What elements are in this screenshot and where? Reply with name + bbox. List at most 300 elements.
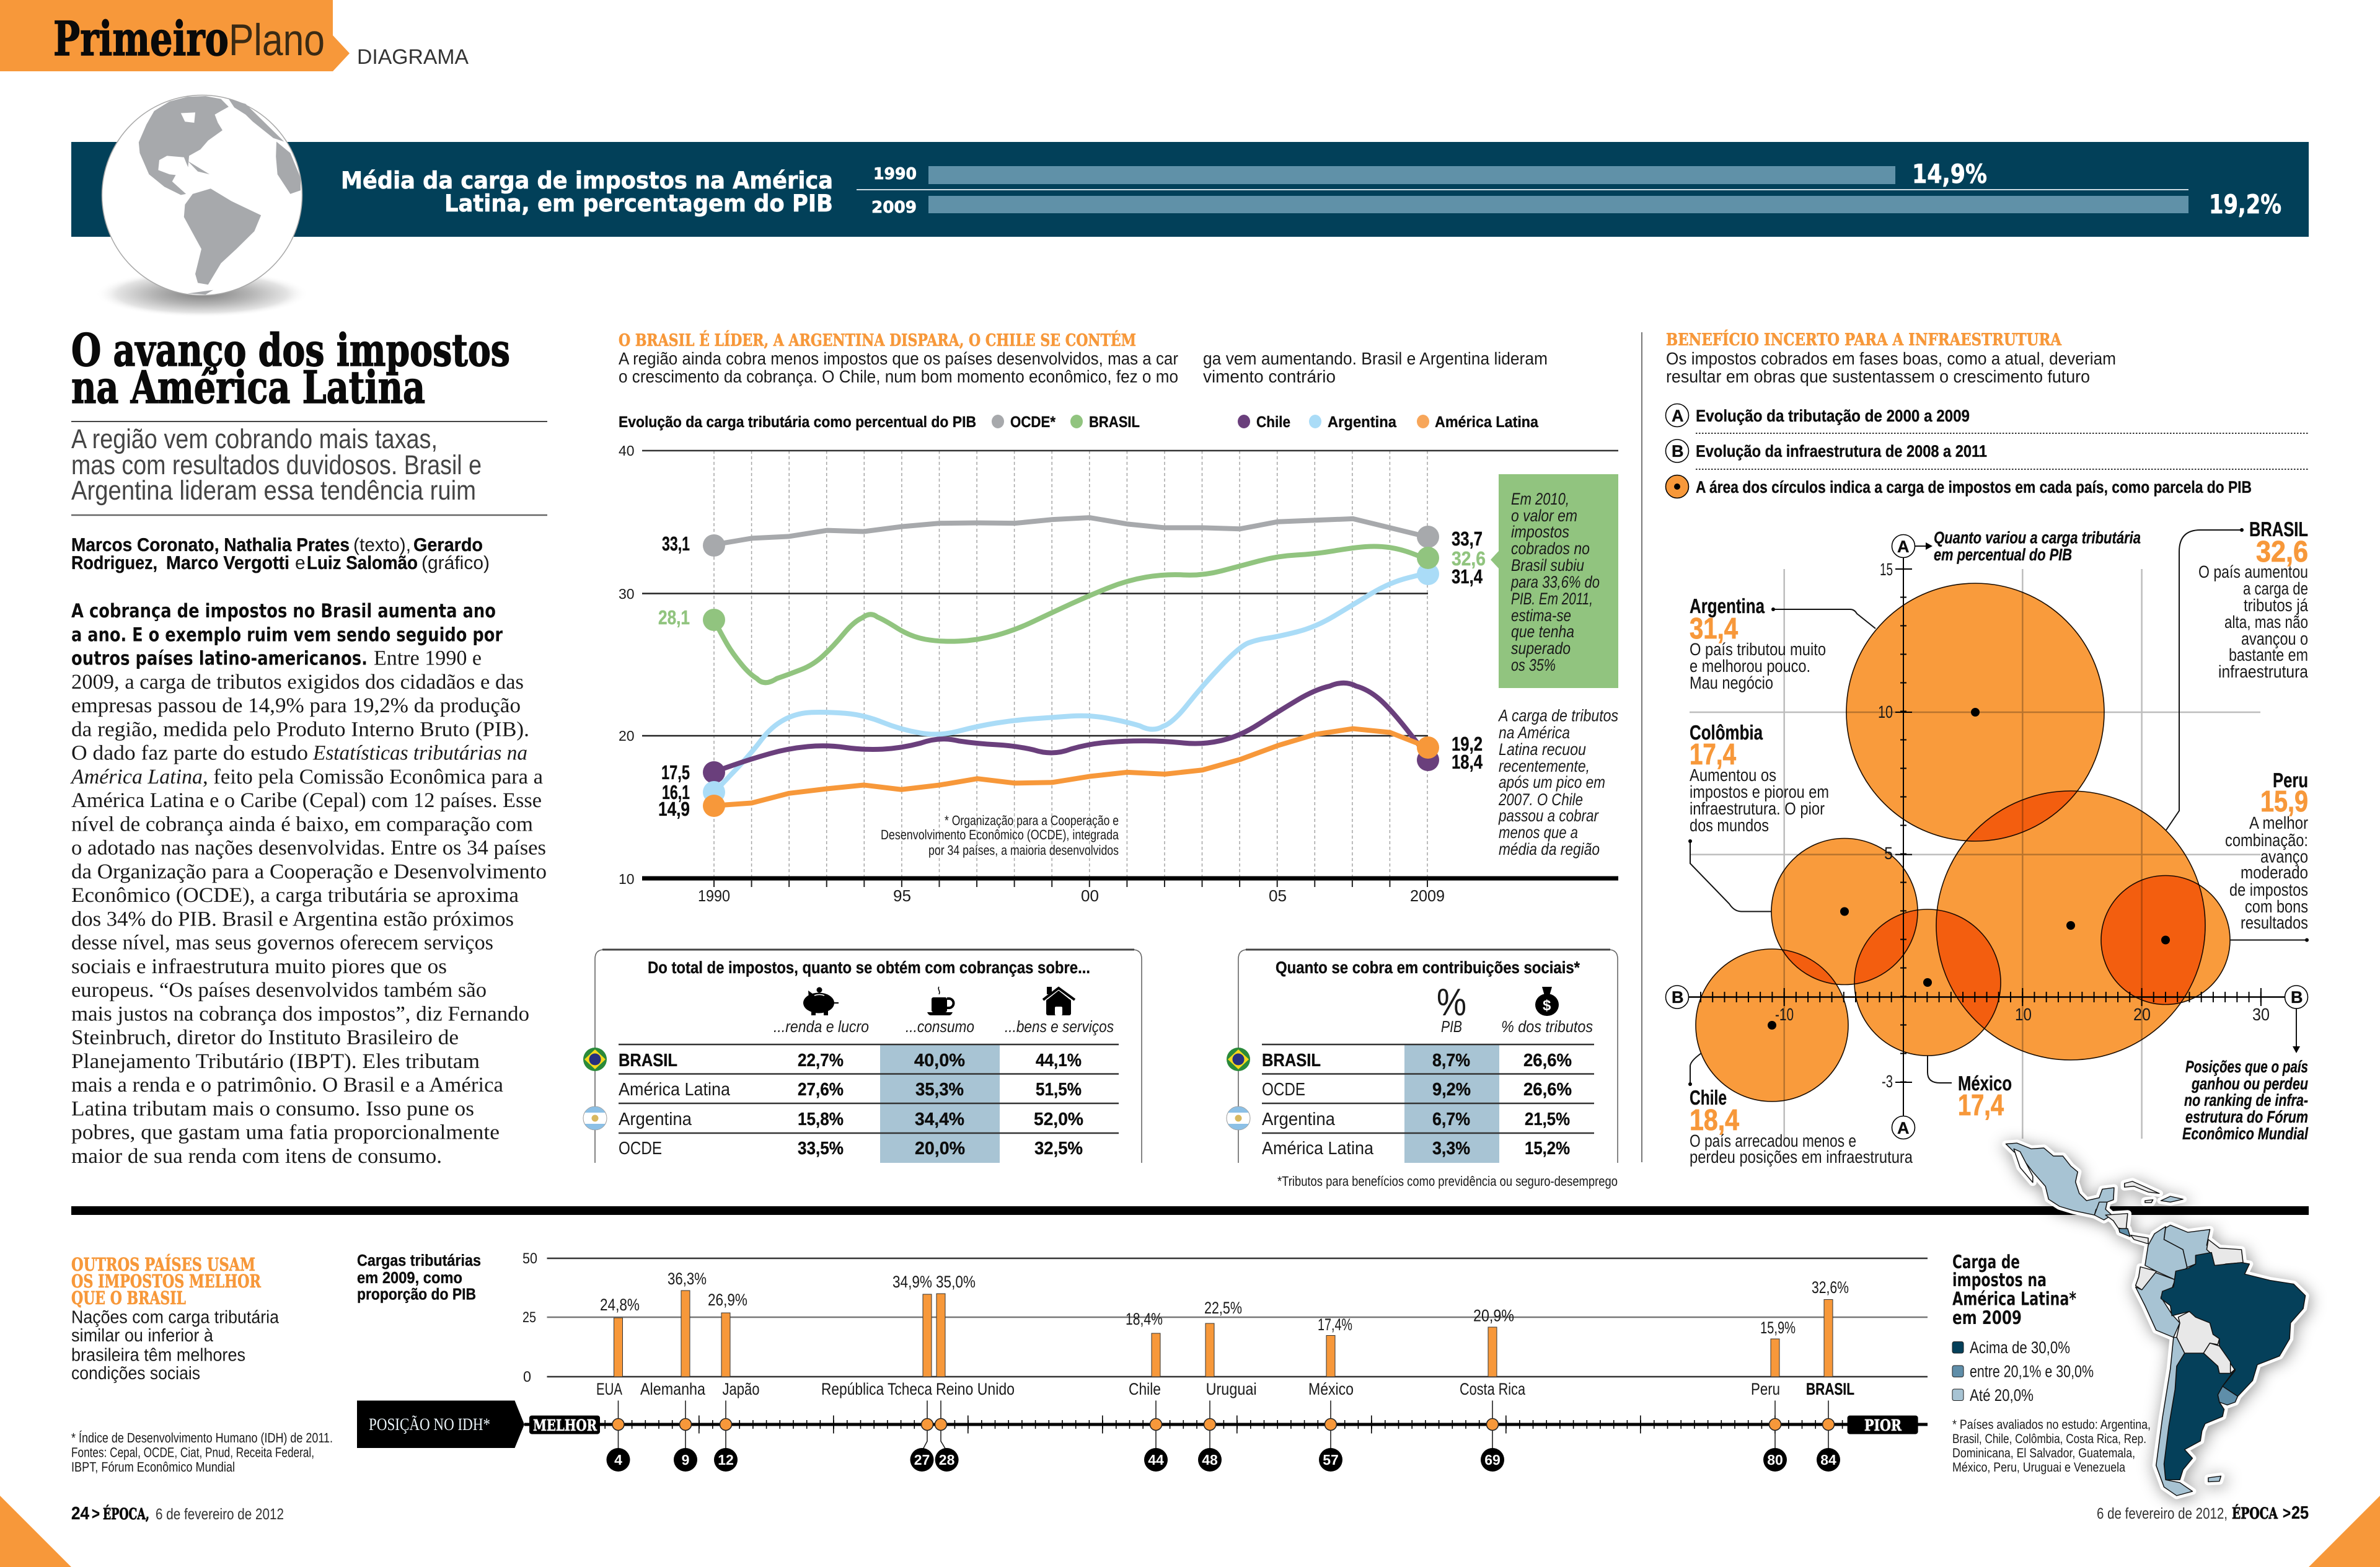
footer left: > bbox=[92, 1504, 100, 1523]
label: Brasil: avançou o bbox=[2241, 629, 2308, 648]
timeline: posição no IDH: 57 bbox=[1323, 1452, 1339, 1468]
callout: green box Brasil: para 33,6% do bbox=[1510, 573, 1600, 591]
line chart: carga tributária: 33,7 bbox=[1452, 527, 1483, 550]
line: Chile bbox=[714, 683, 1428, 772]
axis badge B left bbox=[1666, 986, 1688, 1009]
callout: green box Brasil: Em 2010, bbox=[1511, 490, 1569, 508]
label: Brasil: 32,6 bbox=[2256, 536, 2308, 568]
panel: contribuições sociais: 9,2% bbox=[1432, 1080, 1471, 1100]
article body text: Steinbruch, diretor do Instituto Brasileiro de bbox=[71, 1026, 459, 1049]
article body text: O dado faz parte do estudo bbox=[71, 742, 308, 765]
article body text: 2009, a carga de tributos exigidos dos cidadãos e das bbox=[71, 671, 524, 694]
panel: cobranças sobre: 35,3% bbox=[915, 1080, 964, 1100]
panel: contribuições sociais: 3,3% bbox=[1432, 1139, 1470, 1159]
authors: Rodriguez, bbox=[71, 553, 157, 573]
line chart legend bbox=[619, 413, 1539, 431]
label: Posição no IDH bbox=[357, 1401, 524, 1448]
line chart: carga tributária: 17,5 bbox=[661, 761, 690, 784]
bar chart: cargas tributárias: 35,0% bbox=[936, 1273, 976, 1291]
footer left bbox=[71, 1504, 284, 1524]
panel: cobranças sobre: OCDE bbox=[619, 1139, 662, 1159]
bubble chart key: A área dos círculos indica a carga de impostos em cada país, como parcela do PIB bbox=[1696, 478, 2252, 497]
axis badge A bottom: A bbox=[1897, 1119, 1909, 1137]
axis note B bbox=[2182, 1057, 2308, 1143]
icon: house bbox=[1043, 987, 1075, 1015]
label: Brasil: alta, mas não bbox=[2224, 612, 2308, 632]
flag: Brasil bbox=[1227, 1048, 1250, 1071]
panel: contribuições sociais: BRASIL bbox=[1262, 1051, 1321, 1070]
banner: média da carga de impostos: 19,2% bbox=[2209, 189, 2281, 219]
label: Peru: de impostos bbox=[2229, 880, 2308, 899]
timeline: posição no IDH: 44 bbox=[1148, 1452, 1164, 1468]
panel: contribuições sociais: % dos tributos bbox=[1501, 1017, 1593, 1036]
line chart legend: América Latina bbox=[1435, 413, 1539, 431]
authors: Gerardo bbox=[413, 535, 483, 555]
label: Peru: A melhor bbox=[2249, 813, 2308, 832]
bubble chart key: Evolução da infraestrutura de 2008 a 2011 bbox=[1696, 442, 1987, 461]
leader lines bbox=[1690, 530, 2307, 1084]
label: Colômbia: dos mundos bbox=[1690, 816, 1769, 835]
bar chart: cargas tributárias: 20,9% bbox=[1473, 1307, 1514, 1325]
headline: O avanço dos impostos bbox=[71, 324, 510, 376]
bar chart: cargas tributárias: 50 bbox=[522, 1250, 537, 1267]
bubble chart key: A bbox=[1672, 407, 1683, 425]
section text: outros países: OUTROS PAÍSES USAM bbox=[71, 1254, 255, 1275]
panel: contribuições sociais: Argentina bbox=[1262, 1110, 1336, 1129]
label: Posição no IDH: POSIÇÃO NO IDH* bbox=[369, 1415, 490, 1434]
panel: contribuições sociais: 6,7% bbox=[1432, 1110, 1470, 1129]
bubbles bbox=[1696, 583, 2230, 1101]
panel: cobranças sobre: 44,1% bbox=[1036, 1051, 1082, 1070]
line chart: carga tributária: 95 bbox=[893, 886, 911, 905]
article body text: o adotado nas nações desenvolvidas. Entre os 34 países bbox=[71, 837, 546, 860]
icon: money bag bbox=[1535, 987, 1559, 1016]
article body text: maior de sua renda com itens de consumo. bbox=[71, 1145, 442, 1168]
footnote: OCDE: Desenvolvimento Econômico (OCDE), integrada bbox=[881, 827, 1119, 842]
panel: cobranças sobre: BRASIL bbox=[619, 1051, 677, 1070]
map legend: Acima de 30,0% bbox=[1970, 1338, 2070, 1357]
article body text: mais justos na cobrança dos impostos”, diz Fernando bbox=[71, 1002, 529, 1025]
footnote: sources: * Índice de Desenvolvimento Humano (IDH) de 2011. bbox=[71, 1430, 333, 1446]
line chart legend: Chile bbox=[1256, 413, 1290, 431]
bubble chart: tributação x infraestrutura bbox=[1666, 518, 2309, 1167]
label: Chile: O país arrecadou menos e bbox=[1690, 1131, 1856, 1150]
label: Peru: moderado bbox=[2241, 863, 2308, 882]
axis tick labels bbox=[1775, 560, 2270, 1091]
footer right: 6 de fevereiro de 2012, bbox=[2097, 1505, 2228, 1522]
panel: cobranças sobre: 32,5% bbox=[1034, 1139, 1083, 1159]
axis badge A top: A bbox=[1897, 537, 1909, 556]
label: Chile: Chile bbox=[1690, 1086, 1727, 1109]
section intro: Benefício incerto: Os impostos cobrados em fases boas, como a atual, deveriam bbox=[1666, 349, 2116, 368]
line chart: carga tributária: 2009 bbox=[1410, 886, 1445, 905]
label: Peru: com bons bbox=[2245, 897, 2308, 916]
line chart: carga tributária: 20 bbox=[619, 728, 635, 744]
timeline: posição no IDH bbox=[524, 1401, 1928, 1472]
line: Argentina bbox=[714, 573, 1428, 793]
label: Colômbia: infraestrutura. O pior bbox=[1690, 799, 1825, 818]
footer left: 24 bbox=[71, 1504, 89, 1524]
label: Argentina: Mau negócio bbox=[1690, 673, 1773, 692]
article body text: América Latina e o Caribe (Cepal) com 12 países. Esse bbox=[71, 789, 542, 812]
label: Argentina: Argentina bbox=[1690, 594, 1765, 617]
bar chart: cargas tributárias: 24,8% bbox=[600, 1296, 640, 1314]
panel: contribuições sociais: América Latina bbox=[1262, 1139, 1374, 1159]
section tab: Primeiro Plano: Plano bbox=[229, 15, 325, 65]
line chart: carga tributária: 28,1 bbox=[658, 606, 690, 629]
note: América Latina recuou: média da região bbox=[1499, 840, 1600, 859]
callout: green box Brasil: impostos bbox=[1511, 523, 1569, 541]
label: Brasil: a carga de bbox=[2243, 579, 2308, 598]
line chart: carga tributária: 18,4 bbox=[1452, 751, 1483, 773]
article body text: América Latina bbox=[70, 766, 203, 788]
bar chart: cargas tributárias: México bbox=[1308, 1380, 1354, 1398]
note: América Latina recuou: recentemente, bbox=[1499, 757, 1590, 775]
label: Peru: Peru bbox=[2273, 769, 2308, 792]
banner: média da carga de impostos bbox=[71, 142, 2309, 237]
label: Peru: resultados bbox=[2241, 913, 2308, 932]
article body text bbox=[70, 600, 547, 1168]
authors: (texto), bbox=[353, 535, 411, 555]
axis A bbox=[1895, 558, 1912, 1116]
bar chart: cargas tributárias: 17,4% bbox=[1318, 1315, 1352, 1334]
bubble chart key bbox=[1666, 404, 2308, 498]
callout: green box Brasil: o valor em bbox=[1511, 506, 1577, 525]
panel title: Quanto se cobra em contribuições sociais* bbox=[1276, 958, 1580, 977]
map legend: Carga de bbox=[1952, 1251, 2020, 1273]
panel title: Do total de impostos, quanto se obtém com cobranças sobre... bbox=[648, 958, 1090, 977]
bar chart: cargas tributárias: Japão bbox=[723, 1380, 760, 1398]
article body text: outros países latino-americanos. bbox=[71, 647, 368, 669]
section label: Diagrama: DIAGRAMA bbox=[357, 45, 469, 69]
lede: A região vem cobrando mais taxas, bbox=[71, 424, 438, 454]
label: Peru: 15,9 bbox=[2260, 785, 2308, 818]
bubble: Chile bbox=[1696, 949, 1848, 1101]
timeline: posição no IDH: 69 bbox=[1484, 1452, 1501, 1468]
flag: Brasil bbox=[583, 1048, 607, 1071]
axis note A: em percentual do PIB bbox=[1934, 545, 2072, 564]
panel: contribuições sociais bbox=[1227, 950, 1618, 1163]
axis badge B right bbox=[2285, 986, 2308, 1009]
section text: outros países: condições sociais bbox=[71, 1364, 200, 1384]
section text: outros países: similar ou inferior à bbox=[71, 1326, 214, 1346]
banner: média da carga de impostos: 2009 bbox=[871, 198, 917, 217]
article body text: da Organização para a Cooperação e Desenvolvimento bbox=[71, 860, 547, 883]
axis badge A bottom bbox=[1892, 1116, 1915, 1139]
bar chart: cargas tributárias: República Tcheca bbox=[821, 1380, 933, 1398]
panel: contribuições sociais: PIB bbox=[1441, 1017, 1462, 1036]
panel: contribuições sociais: 26,6% bbox=[1523, 1080, 1572, 1100]
line chart legend: BRASIL bbox=[1089, 413, 1140, 431]
section intro: Benefício incerto: resultar em obras que sustentassem o crescimento futuro bbox=[1666, 367, 2090, 386]
article body text: desse nível, mas seus governos oferecem serviços bbox=[71, 932, 493, 955]
axis tick labels: 5 bbox=[1884, 844, 1893, 863]
icon: money bag: $ bbox=[1543, 997, 1551, 1014]
lede bbox=[71, 424, 482, 506]
authors: e bbox=[295, 553, 306, 573]
section intro: O Brasil é líder: vimento contrário bbox=[1203, 367, 1336, 386]
bar chart: cargas tributárias: Uruguai bbox=[1206, 1380, 1257, 1398]
panel: contribuições sociais: 8,7% bbox=[1432, 1051, 1470, 1070]
bar chart: cargas tributárias: EUA bbox=[596, 1380, 622, 1398]
axis note B: Posições que o país bbox=[2185, 1057, 2308, 1076]
axis note B: estrutura do Fórum bbox=[2185, 1108, 2308, 1126]
article body text: Econômico (OCDE), a carga tributária se aproxima bbox=[71, 884, 519, 907]
panel: cobranças sobre: ...renda e lucro bbox=[774, 1017, 869, 1036]
label: Argentina bbox=[1690, 594, 1826, 692]
article body text: mais a renda e o patrimônio. O Brasil e a América bbox=[71, 1074, 503, 1097]
line chart legend: OCDE* bbox=[1010, 413, 1056, 431]
footnote: sources bbox=[71, 1430, 333, 1475]
callout: green box Brasil: superado bbox=[1511, 639, 1571, 658]
bar chart: cargas tributárias bbox=[522, 1250, 1928, 1398]
panel: contribuições sociais: 21,5% bbox=[1525, 1110, 1570, 1129]
label: Argentina: O país tributou muito bbox=[1690, 640, 1826, 659]
axis badge A top bbox=[1892, 534, 1915, 558]
panel: cobranças sobre: ...consumo bbox=[906, 1017, 974, 1036]
label: Argentina: e melhorou pouco. bbox=[1690, 656, 1810, 676]
article body text: Latina tributam mais o consumo. Isso pune os bbox=[71, 1097, 474, 1121]
article body text: Entre 1990 e bbox=[374, 647, 482, 669]
map legend: impostos na bbox=[1952, 1269, 2047, 1291]
authors: Marcos Coronato, Nathalia Prates bbox=[71, 535, 350, 555]
timeline: posição no IDH: 48 bbox=[1202, 1452, 1218, 1468]
bubble chart key: Evolução da tributação de 2000 a 2009 bbox=[1696, 407, 1970, 425]
line chart: carga tributária: 40 bbox=[619, 443, 635, 459]
authors: Luiz Salomão bbox=[307, 553, 418, 573]
axis tick labels: 20 bbox=[2133, 1005, 2151, 1024]
line: América Latina bbox=[714, 729, 1428, 806]
note: América Latina recuou bbox=[1497, 707, 1618, 859]
panel: cobranças sobre: 34,4% bbox=[915, 1110, 964, 1129]
section divider bar bbox=[71, 1206, 2309, 1215]
section intro: O Brasil é líder bbox=[619, 330, 1548, 386]
axis badge B right: B bbox=[2291, 988, 2303, 1007]
bar chart: cargas tributárias: 34,9% bbox=[892, 1273, 932, 1291]
label: Brasil: O país aumentou bbox=[2198, 562, 2308, 581]
axis note A bbox=[1934, 528, 2141, 564]
panel: cobranças sobre: 33,5% bbox=[798, 1139, 844, 1159]
label: Peru: avanço bbox=[2260, 847, 2308, 867]
bubble: Brasil bbox=[1936, 791, 2205, 1060]
map legend: Até 20,0% bbox=[1970, 1386, 2034, 1405]
callout: green box Brasil: que tenha bbox=[1511, 622, 1574, 641]
section intro: O Brasil é líder: o crescimento da cobrança. O Chile, num bom momento econômico, fez o mo bbox=[619, 367, 1178, 386]
axis tick labels: 10 bbox=[2015, 1005, 2032, 1024]
label: México: México bbox=[1958, 1072, 2012, 1095]
footnote: sources: IBPT, Fórum Econômico Mundial bbox=[71, 1459, 235, 1475]
timeline: posição no IDH: 28 bbox=[939, 1452, 955, 1468]
label: Brasil bbox=[2198, 518, 2308, 681]
footer right: ÉPOCA bbox=[2232, 1504, 2278, 1522]
flag: Argentina bbox=[1227, 1106, 1250, 1130]
panel: cobranças sobre: América Latina bbox=[619, 1080, 731, 1100]
callout: green box Brasil: os 35% bbox=[1511, 656, 1556, 674]
section text: outros países: Nações com carga tributária bbox=[71, 1308, 280, 1328]
pill: Pior: PIOR bbox=[1864, 1416, 1902, 1434]
label: Chile bbox=[1690, 1086, 1913, 1167]
bar chart: cargas tributárias: 0 bbox=[523, 1369, 531, 1385]
map legend: * Países avaliados no estudo: Argentina, bbox=[1952, 1418, 2151, 1432]
article body text: europeus. “Os países desenvolvidos também são bbox=[71, 979, 487, 1002]
bar: 1990 bbox=[928, 166, 1895, 184]
article body text: da região, medida pelo Produto Interno Bruto (PIB). bbox=[71, 718, 529, 741]
footer left: ÉPOCA, bbox=[103, 1504, 149, 1523]
label: Chile: 18,4 bbox=[1690, 1104, 1739, 1137]
timeline: posição no IDH: 4 bbox=[614, 1452, 622, 1468]
bar chart: cargas tributárias: 25 bbox=[522, 1309, 536, 1326]
line chart: carga tributária: 16,1 bbox=[662, 781, 690, 803]
panel: cobranças sobre: 20,0% bbox=[915, 1139, 965, 1159]
bar chart: cargas tributárias: Chile bbox=[1129, 1380, 1161, 1398]
axis tick labels: -3 bbox=[1882, 1072, 1893, 1091]
bar chart: cargas tributárias: Alemanha bbox=[640, 1380, 706, 1398]
section intro: O Brasil é líder: ga vem aumentando. Brasil e Argentina lideram bbox=[1203, 349, 1548, 368]
article body text: Planejamento Tributário (IBPT). Eles tributam bbox=[71, 1050, 480, 1073]
callout: green box Brasil: cobrados no bbox=[1511, 539, 1590, 558]
article body text: dos 34% do PIB. Brasil e Argentina estão próximos bbox=[71, 907, 514, 930]
line: OCDE bbox=[714, 518, 1428, 545]
line chart: carga tributária: 32,6 bbox=[1452, 547, 1486, 570]
section intro: O Brasil é líder: A região ainda cobra menos impostos que os países desenvolvidos, mas a car bbox=[619, 349, 1178, 368]
note: América Latina recuou: após um pico em bbox=[1499, 773, 1605, 792]
axis badge B left: B bbox=[1672, 988, 1683, 1007]
label: Colômbia: Aumentou os bbox=[1690, 766, 1776, 785]
bar chart: cargas tributárias: 26,9% bbox=[708, 1291, 747, 1309]
panel: cobranças sobre: ...bens e serviços bbox=[1005, 1017, 1114, 1036]
label: Argentina: 31,4 bbox=[1690, 612, 1738, 645]
bubble: Colômbia bbox=[1771, 838, 1918, 984]
section text: outros países: QUE O BRASIL bbox=[71, 1287, 186, 1309]
footnote: OCDE: por 34 países, a maioria desenvolvidos bbox=[928, 842, 1119, 858]
footer right: 25 bbox=[2291, 1503, 2309, 1523]
axis note B: ganhou ou perdeu bbox=[2191, 1075, 2308, 1093]
label: México: 17,4 bbox=[1958, 1089, 2004, 1122]
label: Chile: perdeu posições em infraestrutura bbox=[1690, 1147, 1913, 1167]
pill: Pior bbox=[1848, 1416, 1918, 1434]
label: Colômbia: impostos e piorou em bbox=[1690, 782, 1829, 801]
footer right bbox=[2097, 1503, 2309, 1523]
rule bbox=[71, 514, 547, 516]
lede: mas com resultados duvidosos. Brasil e bbox=[71, 450, 482, 480]
callout: green box Brasil: PIB. Em 2011, bbox=[1511, 589, 1593, 608]
bar chart: cargas tributárias: 36,3% bbox=[668, 1269, 707, 1288]
line chart legend: Argentina bbox=[1328, 413, 1397, 431]
label: Colômbia bbox=[1690, 721, 1829, 835]
map legend bbox=[1952, 1251, 2151, 1475]
panel: contribuições sociais: OCDE bbox=[1262, 1080, 1305, 1100]
label: Brasil: tributos já bbox=[2244, 596, 2308, 615]
section text: outros países: OS IMPOSTOS MELHOR bbox=[71, 1271, 262, 1292]
article body text: , feito pela Comissão Econômica para a bbox=[203, 766, 543, 788]
icon: percent: % bbox=[1437, 981, 1466, 1024]
label: México bbox=[1958, 1072, 2012, 1122]
panel: cobranças sobre: 51,5% bbox=[1036, 1080, 1082, 1100]
label: Peru bbox=[2225, 769, 2308, 932]
banner: média da carga de impostos: Latina, em percentagem do PIB bbox=[444, 190, 833, 217]
line: Brasil bbox=[714, 546, 1428, 682]
label: Brasil: infraestrutura bbox=[2218, 662, 2308, 681]
bar chart heading bbox=[357, 1251, 481, 1303]
axis note A: Quanto variou a carga tributária bbox=[1934, 528, 2141, 547]
label: Brasil: bastante em bbox=[2229, 645, 2308, 664]
pill: Melhor: MELHOR bbox=[533, 1416, 597, 1434]
section tab: Primeiro Plano: Primeiro bbox=[53, 11, 229, 66]
section text: outros países: brasileira têm melhores bbox=[71, 1345, 245, 1365]
headline: na América Latina bbox=[71, 361, 425, 413]
panel: cobranças sobre: 15,8% bbox=[798, 1110, 844, 1129]
callout: green box Brasil: Brasil subiu bbox=[1511, 556, 1584, 575]
timeline: posição no IDH: 80 bbox=[1767, 1452, 1783, 1468]
bar chart: cargas tributárias: Costa Rica bbox=[1460, 1380, 1526, 1398]
icon: piggy bank bbox=[803, 987, 839, 1015]
footnote: contribuições sociais: *Tributos para benefícios como previdência ou seguro-desemprego bbox=[1277, 1173, 1618, 1189]
timeline: posição no IDH: 84 bbox=[1820, 1452, 1836, 1468]
bar chart: cargas tributárias: 32,6% bbox=[1812, 1278, 1849, 1297]
bubble: Peru bbox=[2101, 875, 2230, 1004]
timeline: posição no IDH: 9 bbox=[682, 1452, 689, 1468]
map legend: entre 20,1% e 30,0% bbox=[1970, 1362, 2094, 1381]
label: Colômbia: 17,4 bbox=[1690, 738, 1736, 771]
line chart: carga tributária: 00 bbox=[1081, 886, 1099, 905]
bar chart: cargas tributárias: Peru bbox=[1751, 1380, 1780, 1398]
line chart: carga tributária bbox=[619, 443, 1618, 905]
bar: 2009 bbox=[928, 196, 2188, 213]
authors bbox=[71, 535, 490, 573]
panel: cobranças sobre: 52,0% bbox=[1034, 1110, 1083, 1129]
label: Peru: combinação: bbox=[2225, 831, 2308, 850]
line chart: carga tributária: 19,2 bbox=[1452, 733, 1483, 755]
axis note B: Econômico Mundial bbox=[2182, 1124, 2308, 1143]
line chart: carga tributária: 14,9 bbox=[658, 798, 690, 820]
article body text: a ano. E o exemplo ruim vem sendo seguido por bbox=[71, 624, 503, 646]
article body text: sociais e infraestrutura muito piores que os bbox=[71, 955, 447, 978]
callout: green box Brasil bbox=[1491, 474, 1618, 688]
map legend: México, Peru, Uruguai e Venezuela bbox=[1952, 1460, 2125, 1475]
article body text: empresas passou de 14,9% para 19,2% da produção bbox=[71, 694, 521, 717]
icon: globe bbox=[95, 95, 309, 317]
line chart: carga tributária: 30 bbox=[619, 586, 635, 602]
banner: média da carga de impostos: Média da carga de impostos na América bbox=[341, 167, 833, 194]
panel: cobranças sobre: 40,0% bbox=[914, 1051, 965, 1070]
panel: cobranças sobre: 22,7% bbox=[798, 1051, 844, 1070]
icon: coffee cup bbox=[927, 987, 954, 1015]
panel: cobranças sobre bbox=[583, 950, 1142, 1163]
label: Brasil: BRASIL bbox=[2249, 518, 2308, 541]
authors: Marco Vergotti bbox=[166, 553, 289, 573]
section tab: Primeiro Plano bbox=[0, 0, 350, 71]
map: Latin America bbox=[2006, 1143, 2306, 1496]
banner: média da carga de impostos: 1990 bbox=[873, 165, 917, 183]
axis tick labels: -10 bbox=[1775, 1005, 1794, 1024]
article body text: Estatísticas tributárias na bbox=[312, 742, 527, 765]
footer left: 6 de fevereiro de 2012 bbox=[156, 1506, 284, 1523]
line chart: carga tributária: 33,1 bbox=[662, 532, 690, 555]
axis tick labels: 15 bbox=[1880, 560, 1893, 579]
rule bbox=[71, 421, 547, 422]
line chart: carga tributária: 31,4 bbox=[1452, 565, 1483, 588]
bar chart: cargas tributárias: 18,4% bbox=[1126, 1310, 1163, 1328]
banner: média da carga de impostos: 14,9% bbox=[1912, 159, 1987, 189]
article body text: nível de cobrança ainda é baixo, em comparação com bbox=[71, 813, 533, 836]
section intro: Benefício incerto: BENEFÍCIO INCERTO PARA A INFRAESTRUTURA bbox=[1666, 329, 2062, 350]
panel: cobranças sobre: 27,6% bbox=[798, 1080, 844, 1100]
bar chart: cargas tributárias: Reino Unido bbox=[936, 1380, 1015, 1398]
bubble: Argentina bbox=[1846, 583, 2104, 841]
map legend: Dominicana, El Salvador, Guatemala, bbox=[1952, 1446, 2135, 1460]
line chart: carga tributária: 10 bbox=[619, 871, 635, 887]
bar chart heading: proporção do PIB bbox=[357, 1284, 476, 1303]
